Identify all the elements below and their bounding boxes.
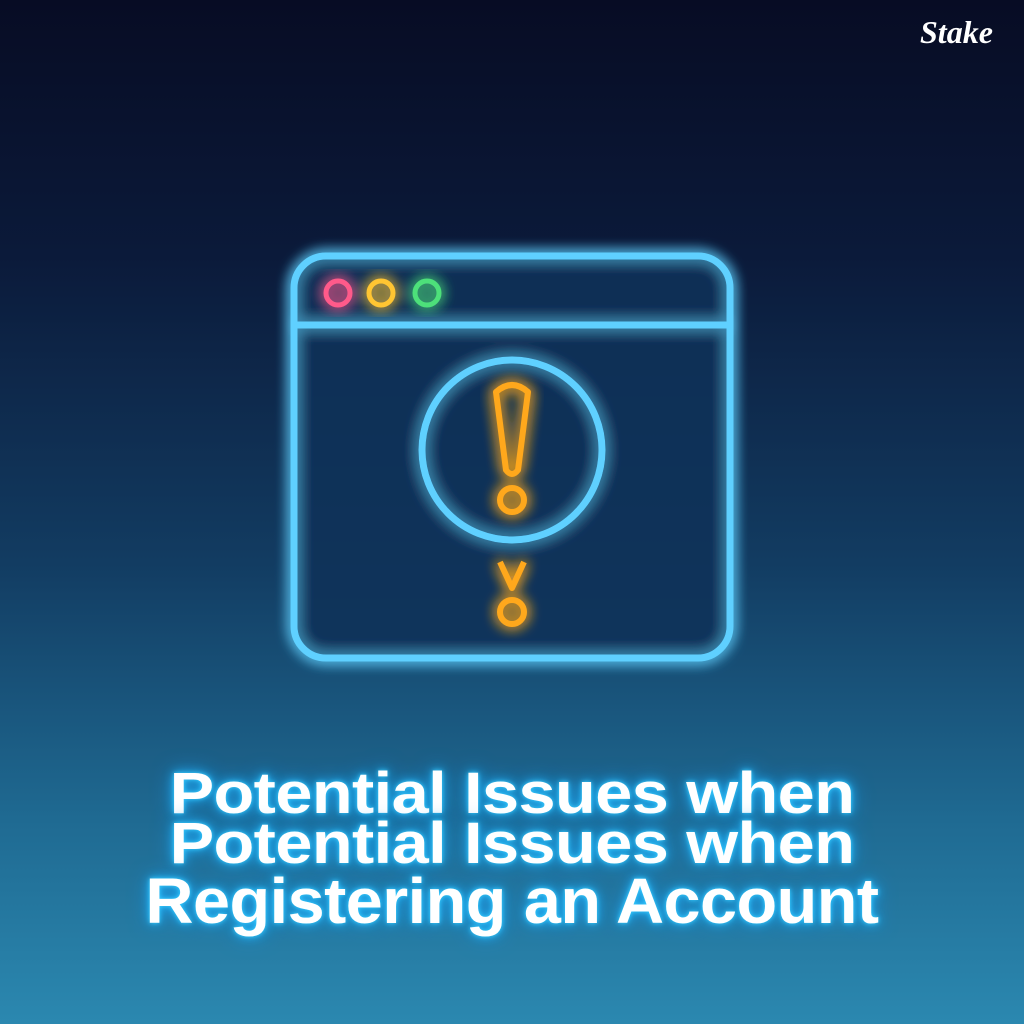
title: Potential Issues when xyxy=(170,811,854,876)
logo: Stake: Stake xyxy=(920,14,993,50)
title: Registering an Account xyxy=(145,865,879,937)
exclamation marks xyxy=(496,385,528,624)
title xyxy=(138,761,886,946)
browser frame xyxy=(294,256,730,658)
window dots xyxy=(326,281,439,305)
title: Potential Issues when xyxy=(170,761,854,826)
